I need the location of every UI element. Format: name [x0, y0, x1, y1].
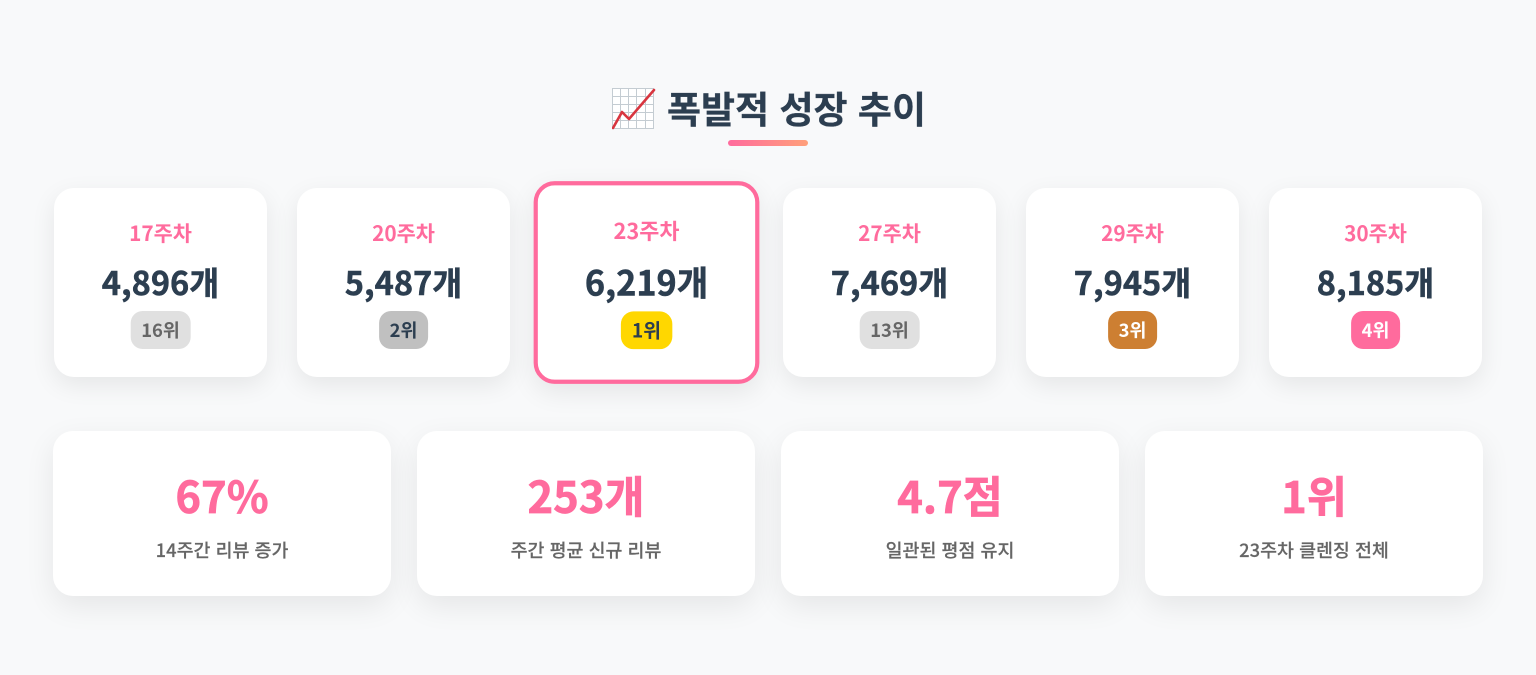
- review count: 8,185개: [1317, 258, 1434, 305]
- week label: 23주차: [614, 214, 679, 245]
- rank badge: 4위: [1362, 317, 1389, 343]
- rank badge: 16위: [141, 317, 180, 343]
- stat label: 주간 평균 신규 리뷰: [511, 537, 661, 563]
- rank badge: 2위: [390, 317, 417, 343]
- panel: stat top rank: [1145, 431, 1483, 596]
- stat label: 일관된 평점 유지: [886, 537, 1014, 563]
- rank badge: [859, 311, 920, 349]
- panel: stat rating: [781, 431, 1119, 596]
- panel: stat review growth: [53, 431, 391, 596]
- panel: week 17: [54, 188, 267, 377]
- title: [612, 80, 926, 134]
- stat value: 4.7점: [897, 463, 1003, 526]
- week label: 17주차: [129, 217, 192, 247]
- week label: 27주차: [858, 217, 921, 247]
- review count: 6,219개: [585, 257, 708, 306]
- stat value: 1위: [1281, 463, 1347, 526]
- rank badge: 1위: [632, 317, 661, 344]
- stat label: 23주차 클렌징 전체: [1239, 537, 1389, 563]
- review count: 4,896개: [102, 258, 219, 305]
- heading text: 폭발적 성장 추이: [667, 80, 926, 134]
- stat value: 253개: [527, 463, 644, 526]
- week label: 29주차: [1101, 217, 1164, 247]
- week label: 20주차: [372, 217, 435, 247]
- rank badge: 3위: [1119, 317, 1146, 343]
- panel: week 20: [297, 188, 510, 377]
- panel: week 23 highlighted: [534, 181, 759, 384]
- rank badge: [379, 311, 428, 349]
- panel: week 30: [1269, 188, 1482, 377]
- icon: chart increasing: [612, 88, 656, 130]
- review count: 7,945개: [1074, 258, 1191, 305]
- panel: stat weekly reviews: [417, 431, 755, 596]
- rank badge: 13위: [870, 317, 909, 343]
- rank badge: [1108, 311, 1157, 349]
- rank badge: [620, 311, 673, 349]
- rank badge: [1351, 311, 1400, 349]
- week label: 30주차: [1344, 217, 1407, 247]
- review count: 7,469개: [831, 258, 948, 305]
- review count: 5,487개: [345, 258, 462, 305]
- stat label: 14주간 리뷰 증가: [156, 537, 288, 563]
- panel: week 29: [1026, 188, 1239, 377]
- rank badge: [130, 311, 191, 349]
- stat value: 67%: [175, 463, 269, 526]
- title underline: [728, 140, 808, 146]
- panel: week 27: [783, 188, 996, 377]
